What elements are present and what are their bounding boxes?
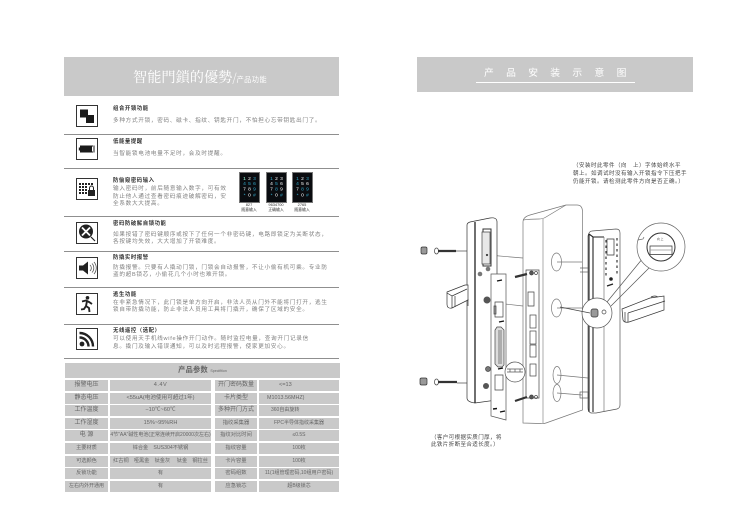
keypad caption 1: 827 xyxy=(246,202,252,207)
keypad 3: 3 xyxy=(306,176,309,182)
table heading: 产品参数 Specifition xyxy=(178,365,227,374)
keypad illustrations xyxy=(239,172,313,212)
enlarged part callout: 向 上 xyxy=(657,237,664,241)
keypad caption 1 xyxy=(241,202,257,212)
small magnifier circle xyxy=(560,298,612,328)
row 4 xyxy=(65,418,339,429)
row 5 xyxy=(65,430,339,441)
row 1: 报警电压 xyxy=(74,382,98,388)
keypad caption 3: 2765 xyxy=(298,202,306,207)
row 6: 100枚 xyxy=(292,445,306,451)
row 9: 左右内外开通用 xyxy=(69,483,104,489)
feature text: escape xyxy=(113,298,328,313)
enlarged part callout xyxy=(607,223,685,306)
keypad 3: 1 xyxy=(296,176,299,182)
row 9 xyxy=(65,481,339,492)
note: part orientation xyxy=(573,162,687,185)
feature title: wireless: 无线遥控（选配） xyxy=(113,328,161,334)
keypad caption 3 xyxy=(294,202,310,212)
feature text: alarm: 盗的超B锁芯，小偷花几个小时也难开锁。 xyxy=(113,272,231,278)
keypad 2: 1 xyxy=(270,176,273,182)
keypad 2: 2 xyxy=(275,176,278,182)
keypad 3: 5 xyxy=(301,181,304,187)
keypad 1: 5 xyxy=(248,181,251,187)
row 1: <=13 xyxy=(279,382,292,388)
row 5: 指纹对比时间 xyxy=(220,432,252,438)
feature text: anti-peep password xyxy=(113,184,227,207)
keypad 2: 3 xyxy=(280,176,283,182)
keypad 2: 6 xyxy=(280,181,283,187)
keypad 1: 4 xyxy=(243,181,246,187)
row 7 xyxy=(65,456,339,467)
row 2: 静态电压 xyxy=(74,394,98,400)
feature text: wireless xyxy=(113,334,309,350)
icon: wrong-key lock xyxy=(76,222,98,244)
keypad 1: * xyxy=(244,193,246,199)
row 5: 电 源 xyxy=(80,432,93,438)
keypad 2: 8 xyxy=(275,187,278,193)
feature text: wireless: 息。撬门及输入错误通知，可以及时远程报警，使家更加安心。 xyxy=(113,344,290,350)
feature text: alarm xyxy=(113,264,328,278)
row 8: 有 xyxy=(158,470,163,476)
feature title: wrong-key lock: 密码防破解自锁功能 xyxy=(113,220,166,226)
keypad caption 2: 9634700 xyxy=(268,202,284,207)
row 4: FPC半导体指纹采集器 xyxy=(274,420,324,426)
feature title: escape: 逃生功能 xyxy=(113,292,137,298)
row 2 xyxy=(65,393,339,404)
feature text: escape: 在非紧急情况下，此门锁是单方向开启，非法人员从门外不能将门打开，逃生 xyxy=(113,300,328,306)
feature text: wireless: 可以使用天手机线wife操作开门动作。随时监控电量，查询开门记录信 xyxy=(113,336,309,342)
feature text: anti-peep password: 输入密码时，前后随意输入数字，可有效 xyxy=(113,186,227,192)
row 3: 工作温度 xyxy=(74,407,98,413)
keypad 3: 0 xyxy=(301,193,304,199)
row 8 xyxy=(65,468,339,479)
row 4: 指纹采集器 xyxy=(223,420,249,426)
keypad 2: # xyxy=(280,193,283,199)
heading text: 产品安装示意图 xyxy=(484,68,639,79)
row 3: 多种开门方式 xyxy=(218,407,254,413)
note: cut to door thickness: （客户可根据实质门厚，将 xyxy=(431,435,502,441)
keypad 2: 5 xyxy=(275,181,278,187)
feature text: low battery: 当智能锁电池电量不足时，会及时提醒。 xyxy=(113,150,227,156)
feature text: combined unlock: 多种方式开锁，密码、磁卡、指纹、钥匙开门，不怕担心忘带钥匙出门了。 xyxy=(113,118,321,124)
keypad caption 1: 随意输入 xyxy=(241,207,257,212)
heading band: smart lock advantages: 智能門鎖的優勢/产品功能 xyxy=(133,67,267,87)
keypad 1: 8 xyxy=(248,187,251,193)
row 1: 4.4V xyxy=(154,382,167,388)
keypad 1: 7 xyxy=(243,187,246,193)
icon: escape runner xyxy=(76,293,98,315)
note: part orientation: 朝上。如调试时没有输入开锁指令下压把手 xyxy=(573,171,687,177)
feature text: alarm: 防撬报警。只要有人撬动门锁，门锁会自动报警，不让小偷有机可乘。专业防 xyxy=(113,264,328,270)
keypad 3: 2 xyxy=(301,176,304,182)
keypad 1: 3 xyxy=(253,176,256,182)
icon: wireless xyxy=(76,328,98,350)
keypad 3: 6 xyxy=(306,181,309,187)
row 6: 主要材质 xyxy=(76,445,97,451)
row 2: M1013.56MHZ) xyxy=(267,394,304,400)
feature title: anti-peep password: 防偷窥密码输入 xyxy=(113,178,155,184)
feature title: combined unlock: 组合开锁功能 xyxy=(113,106,149,112)
feature text: anti-peep password: 全系数大大提高。 xyxy=(113,201,164,207)
row 2: <55uA(电池使用可超过1年) xyxy=(127,394,194,400)
keypad 3: * xyxy=(296,193,298,199)
heading band: smart lock advantages xyxy=(64,57,339,96)
row 8: 11(1组管理密码,10组用户密码) xyxy=(265,470,333,476)
keypad 3: 7 xyxy=(296,187,299,193)
keypad 1: 1 xyxy=(243,176,246,182)
keypad 3 xyxy=(292,172,312,203)
note: part orientation: （安装时此零件（向 上）字体始终水平 xyxy=(573,163,681,169)
door slab xyxy=(488,205,588,424)
mortise xyxy=(515,270,539,401)
note: part orientation: 仍能开锁。请检测此零件方向是否正确。） xyxy=(573,179,684,185)
row 6: 锌合金 SUS304不锈钢 xyxy=(133,445,188,451)
feature text: escape: 锁自带防撬功能，防止非法人员用工具将门撬开，确保了区域的安全。 xyxy=(113,307,309,313)
feature title: low battery: 低能量提醒 xyxy=(113,138,143,144)
row 3 xyxy=(65,405,339,416)
keypad caption 3: 随意输入 xyxy=(294,207,310,212)
keypad 1: # xyxy=(253,193,256,199)
row 9: 有 xyxy=(158,483,163,489)
row 9: 应急锁芯 xyxy=(225,483,247,489)
keypad 2 xyxy=(266,172,286,203)
feature text: anti-peep password: 防止他人通过查看密码痕迹破解密码，安 xyxy=(113,194,227,200)
icon: alarm speaker xyxy=(76,257,98,279)
row 7: 卡片容量 xyxy=(225,458,247,464)
row 3: −10℃~60℃ xyxy=(145,407,176,413)
keypad 1: 6 xyxy=(253,181,256,187)
installation exploded diagram xyxy=(420,204,686,424)
keypad 1: 9 xyxy=(253,187,256,193)
row 7: 红古铜 哑黑金 钛金灰 钛金 钢拉丝 xyxy=(113,458,208,464)
row 3: 360自由旋转 xyxy=(271,407,299,413)
latch magnifier xyxy=(505,362,525,382)
row 2: 卡片类型 xyxy=(224,394,248,400)
keypad 1 xyxy=(239,172,260,203)
keypad 2: 9 xyxy=(280,187,283,193)
keypad 2: 7 xyxy=(270,187,273,193)
heading underline xyxy=(476,82,635,83)
row 4: 15%~95%RH xyxy=(144,420,177,426)
keypad 1: 2 xyxy=(248,176,251,182)
row 5: 4节"AA"碱性电池(正常连续开启20000次左右) xyxy=(110,432,211,438)
feature text: wrong-key lock: 各按键均失效，大大增加了开锁难度。 xyxy=(113,238,220,244)
left outer panel and handle xyxy=(447,218,497,403)
icon: anti-peep password xyxy=(76,178,98,200)
row 9: 超B级锁芯 xyxy=(287,483,311,489)
keypad 2: * xyxy=(270,193,272,199)
feature title: alarm: 防撬实时报警 xyxy=(113,254,149,260)
row 1: 开门密码数量 xyxy=(218,382,254,388)
note: cut to door thickness: 此铁片折断至合适长度。） xyxy=(431,442,499,448)
keypad 3: 4 xyxy=(296,181,299,187)
keypad 3: # xyxy=(306,193,309,199)
keypad caption 2 xyxy=(268,202,284,212)
right keypad panel and handle xyxy=(580,229,665,413)
table heading xyxy=(65,363,340,378)
row 8: 密码组数 xyxy=(225,470,247,476)
feature text: wrong-key lock xyxy=(113,230,328,244)
keypad 2: 4 xyxy=(270,181,273,187)
screws xyxy=(420,247,467,385)
keypad 1: 0 xyxy=(248,193,251,199)
heading band: installation diagram xyxy=(417,57,693,92)
feature text: wrong-key lock: 如果按错了密码键顺序或按下了任何一个非密码键，电路即锁定为关断状态， xyxy=(113,232,328,238)
row 1 xyxy=(65,380,339,391)
row 7: 可选颜色 xyxy=(76,458,97,464)
icon: combined unlock xyxy=(76,105,98,127)
icon: low battery xyxy=(76,138,98,160)
row 6: 指纹容量 xyxy=(225,445,247,451)
row 6 xyxy=(65,443,339,454)
row 8: 反锁功能 xyxy=(76,470,97,476)
row 4: 工作湿度 xyxy=(74,420,98,426)
keypad 3: 9 xyxy=(306,187,309,193)
keypad caption 2: 正确输入 xyxy=(268,207,284,212)
note: cut to door thickness xyxy=(431,434,502,448)
keypad 3: 8 xyxy=(301,187,304,193)
panel: specification table xyxy=(65,363,340,492)
keypad 2: 0 xyxy=(275,193,278,199)
row 7: 100枚 xyxy=(292,458,306,464)
row 5: ≤0.5S xyxy=(292,432,306,438)
middle plate xyxy=(483,274,506,420)
